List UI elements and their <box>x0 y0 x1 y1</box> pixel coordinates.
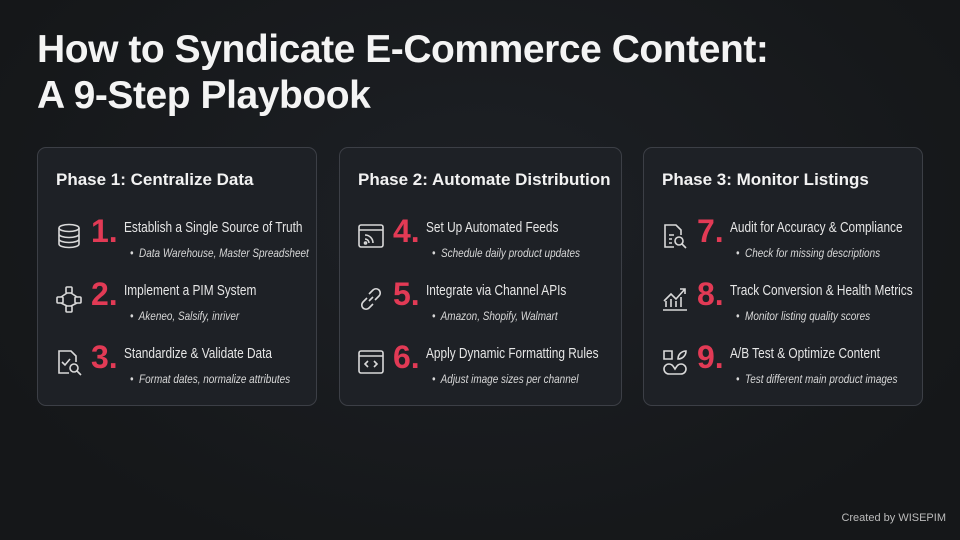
step 9: 9. <box>697 339 724 375</box>
step 9: A/B Test & Optimize Content <box>730 345 880 362</box>
heading: phase 2: Phase 2: Automate Distribution <box>358 170 611 189</box>
step 7: 7. <box>697 213 724 249</box>
step 1: 1. <box>91 213 118 249</box>
step 1: Establish a Single Source of Truth <box>124 219 303 236</box>
step 1: • Data Warehouse, Master Spreadsheet <box>130 246 309 260</box>
credit: Created by WISEPIM <box>841 512 946 524</box>
step 5: • Amazon, Shopify, Walmart <box>432 309 558 323</box>
panel: phase 3 <box>643 147 923 406</box>
step 9 <box>663 339 898 386</box>
step 4: Set Up Automated Feeds <box>426 219 558 236</box>
title <box>37 28 768 117</box>
title: How to Syndicate E-Commerce Content: <box>37 28 768 71</box>
icon: code window <box>358 350 384 374</box>
step 8: • Monitor listing quality scores <box>736 309 870 323</box>
step 5: 5. <box>393 276 420 312</box>
icon: ab test <box>663 350 687 375</box>
title: A 9-Step Playbook <box>37 74 370 117</box>
panel: phase 1 <box>37 147 317 406</box>
step 6: Apply Dynamic Formatting Rules <box>426 345 599 362</box>
step 4 <box>358 213 580 260</box>
step 7 <box>664 213 903 260</box>
step 8: Track Conversion & Health Metrics <box>730 282 913 299</box>
step 3: • Format dates, normalize attributes <box>130 372 290 386</box>
step 6 <box>358 339 599 386</box>
icon: validate doc <box>58 350 82 376</box>
step 5: Integrate via Channel APIs <box>426 282 566 299</box>
step 6: • Adjust image sizes per channel <box>432 372 579 386</box>
step 3: Standardize & Validate Data <box>124 345 272 362</box>
icon: feed <box>358 224 384 248</box>
step 2: • Akeneo, Salsify, inriver <box>130 309 239 323</box>
step 9: • Test different main product images <box>736 372 897 386</box>
step 5 <box>361 276 566 323</box>
step 4: 4. <box>393 213 420 249</box>
icon: network <box>56 286 82 313</box>
step 6: 6. <box>393 339 420 375</box>
heading: phase 3: Phase 3: Monitor Listings <box>662 170 869 189</box>
icon: chart <box>663 288 687 311</box>
step 2 <box>56 276 256 323</box>
heading: phase 1: Phase 1: Centralize Data <box>56 170 253 189</box>
step 2: 2. <box>91 276 118 312</box>
panel: phase 2 <box>339 147 622 406</box>
icon: link <box>361 288 381 310</box>
step 7: • Check for missing descriptions <box>736 246 880 260</box>
step 1 <box>58 213 310 260</box>
step 8: 8. <box>697 276 724 312</box>
icon: database <box>58 224 80 248</box>
step 4: • Schedule daily product updates <box>432 246 580 260</box>
icon: audit doc <box>664 224 686 249</box>
step 3 <box>58 339 290 386</box>
step 2: Implement a PIM System <box>124 282 256 299</box>
step 3: 3. <box>91 339 118 375</box>
step 8 <box>663 276 913 323</box>
step 7: Audit for Accuracy & Compliance <box>730 219 903 236</box>
